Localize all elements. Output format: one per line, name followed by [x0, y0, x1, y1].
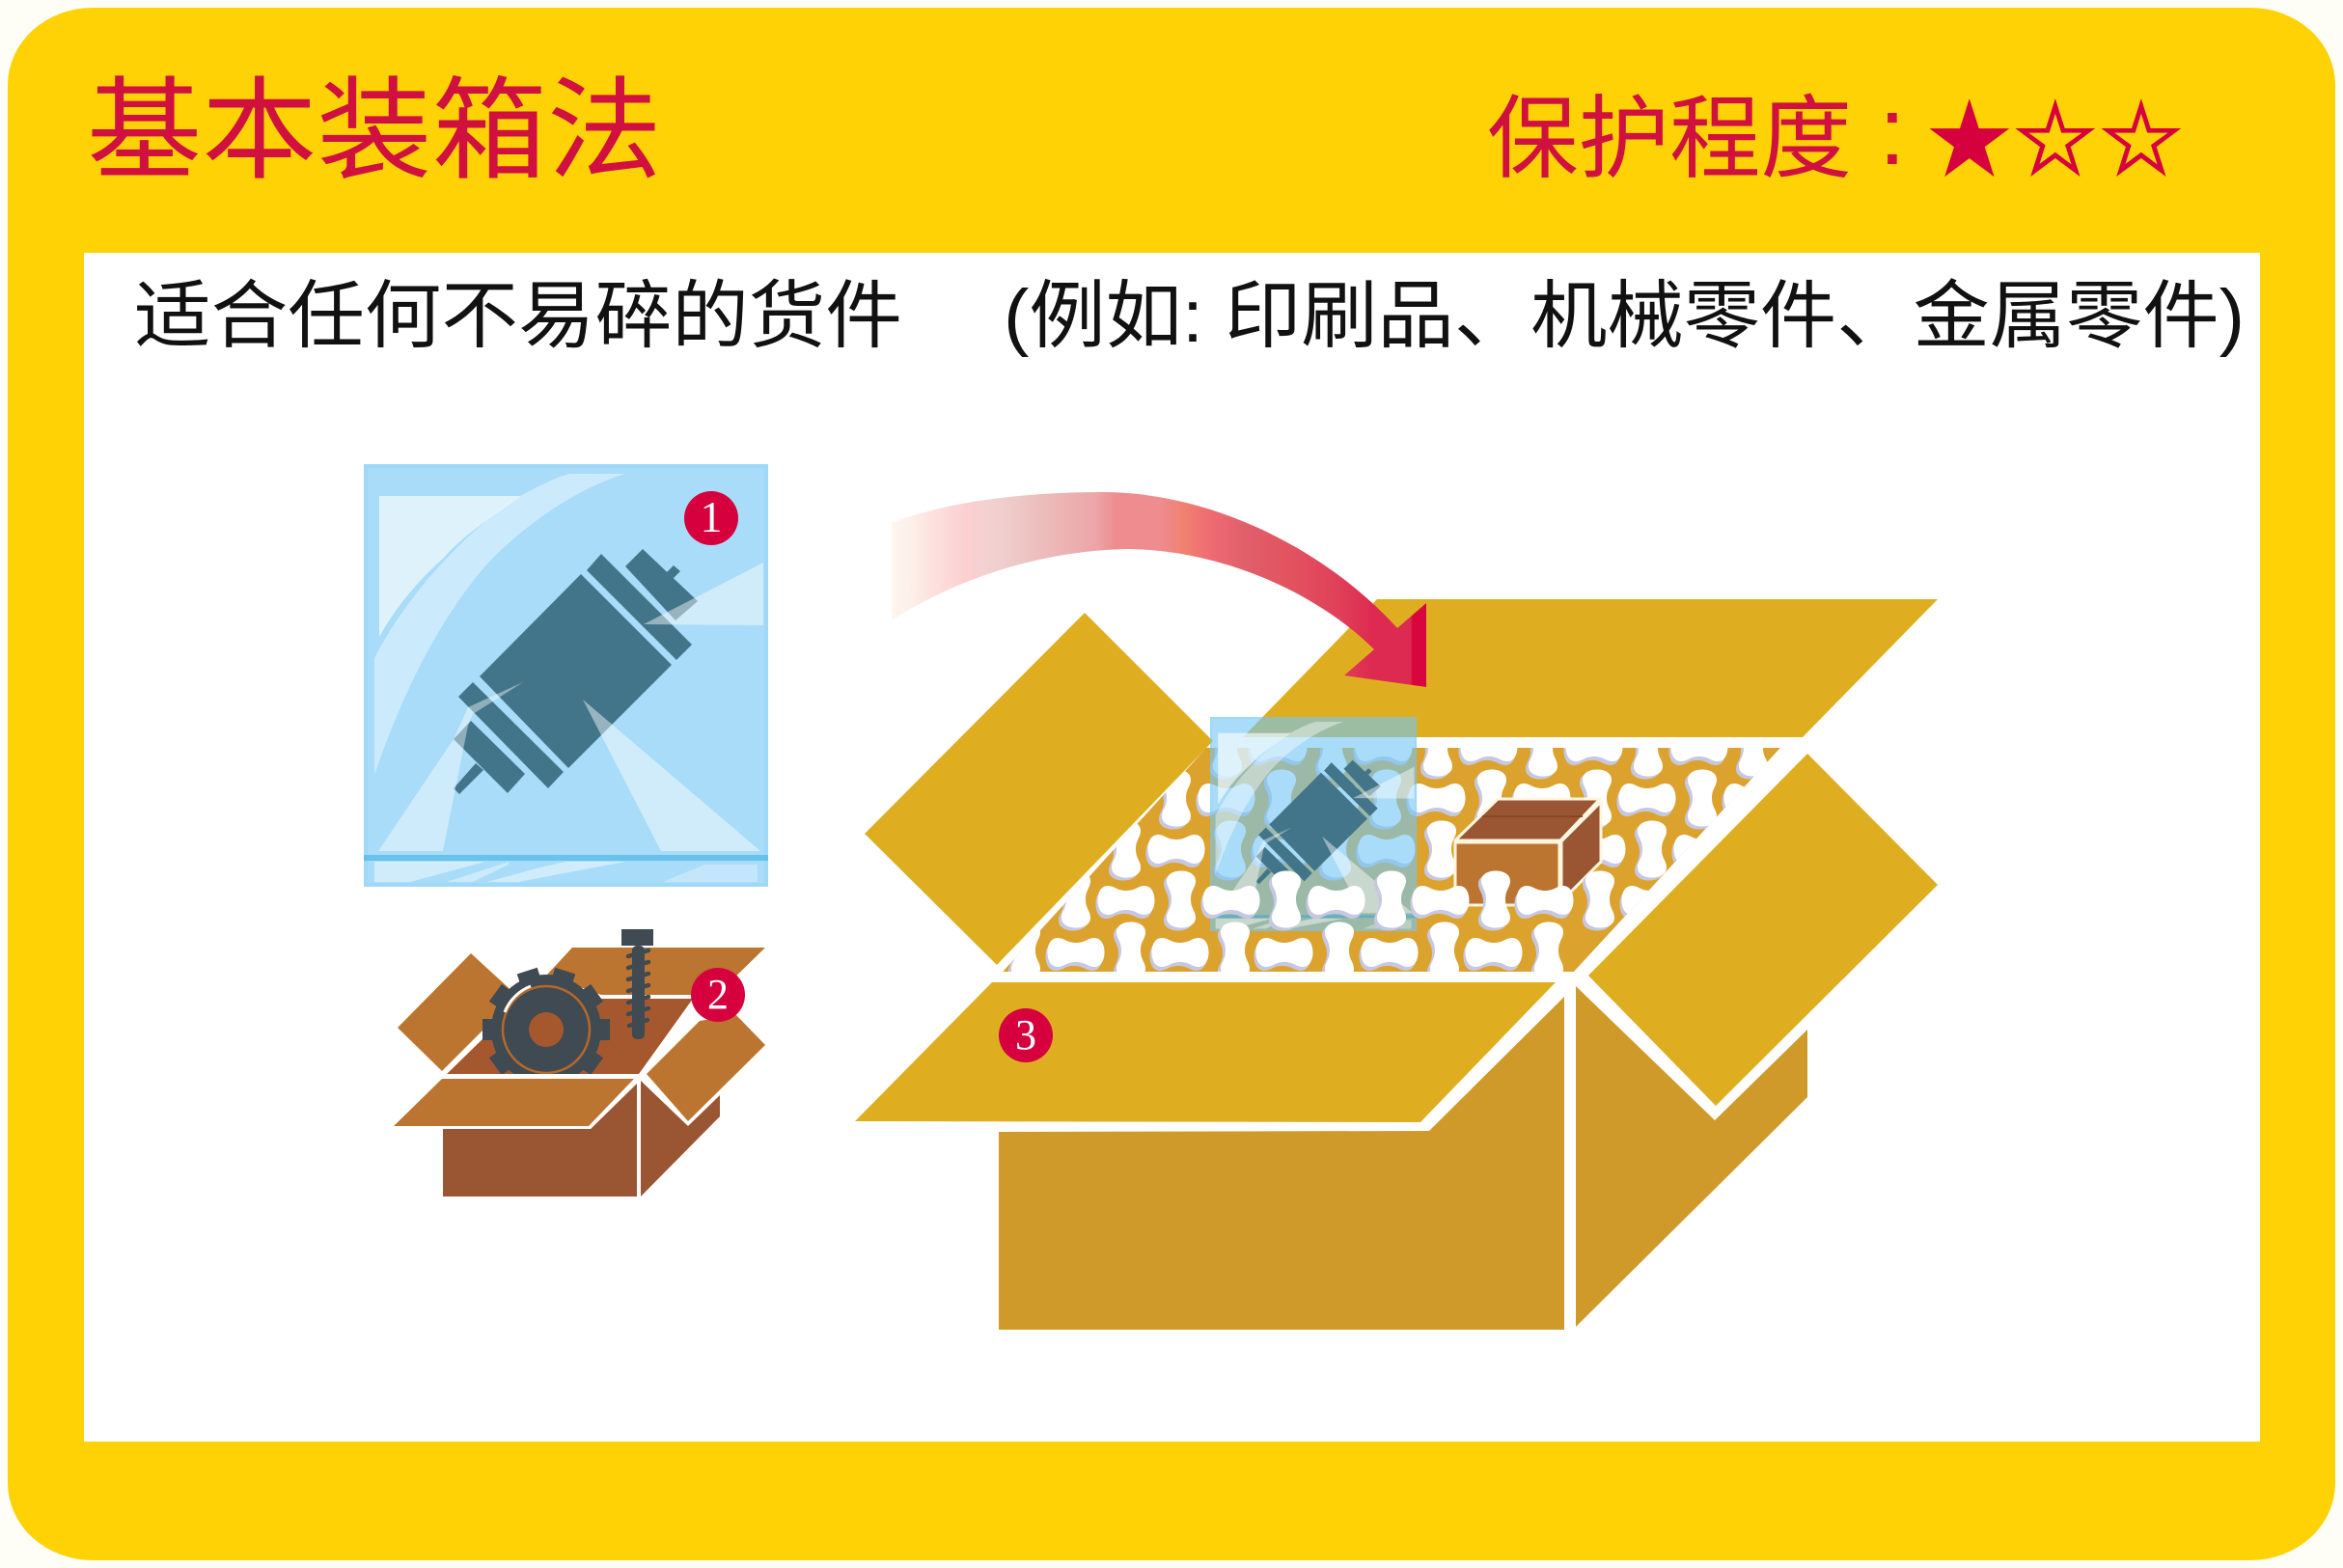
small box right flap [647, 1015, 765, 1121]
star rating: ★☆☆ [1926, 82, 2185, 197]
badge 1: 1 [701, 492, 722, 541]
step 3: large box with cushioning [855, 599, 1938, 1330]
protection level [1487, 77, 2185, 197]
small box right face [641, 1081, 720, 1197]
badge 2: 2 [707, 971, 729, 1018]
badge 1 [684, 491, 738, 545]
large box right face [1576, 986, 1807, 1327]
large box front flap [855, 982, 1556, 1122]
large box right flap [1588, 754, 1938, 1106]
large box back flap [1243, 599, 1938, 737]
badge 2 [691, 968, 745, 1022]
small box left flap [398, 953, 517, 1071]
arrow from bag to box [892, 492, 1426, 687]
large box left flap [865, 613, 1213, 965]
title: 基本装箱法 [87, 69, 662, 193]
icon: gear [482, 968, 610, 1085]
small brown box inside [1455, 799, 1601, 905]
step 1: item in plastic bag [364, 464, 768, 887]
arrow head [1344, 603, 1426, 687]
bagged motor inside box [1210, 717, 1417, 931]
large box front face [999, 997, 1564, 1330]
packing peanuts over items [1008, 870, 1648, 972]
white content panel [84, 253, 2260, 1442]
step 2: small box with metal parts [394, 929, 765, 1197]
protection label: 保护程度 [1487, 88, 1852, 189]
small box back flap [547, 948, 765, 995]
badge 3 [999, 1008, 1053, 1062]
suitability description: 适合任何不易碎的货件 [134, 275, 902, 358]
packing peanuts under items [1003, 748, 1780, 972]
badge 3: 3 [1015, 1011, 1036, 1059]
examples of goods: (例如: 印刷品、机械零件、金属零件) [1004, 275, 2245, 358]
colon: : [1879, 77, 1906, 185]
small box front face [443, 1084, 637, 1197]
small box front flap [394, 1079, 634, 1126]
icon: screw [621, 929, 653, 1039]
arrow body [892, 492, 1397, 649]
small box interior [447, 999, 693, 1074]
plastic bag with motor [364, 464, 768, 887]
